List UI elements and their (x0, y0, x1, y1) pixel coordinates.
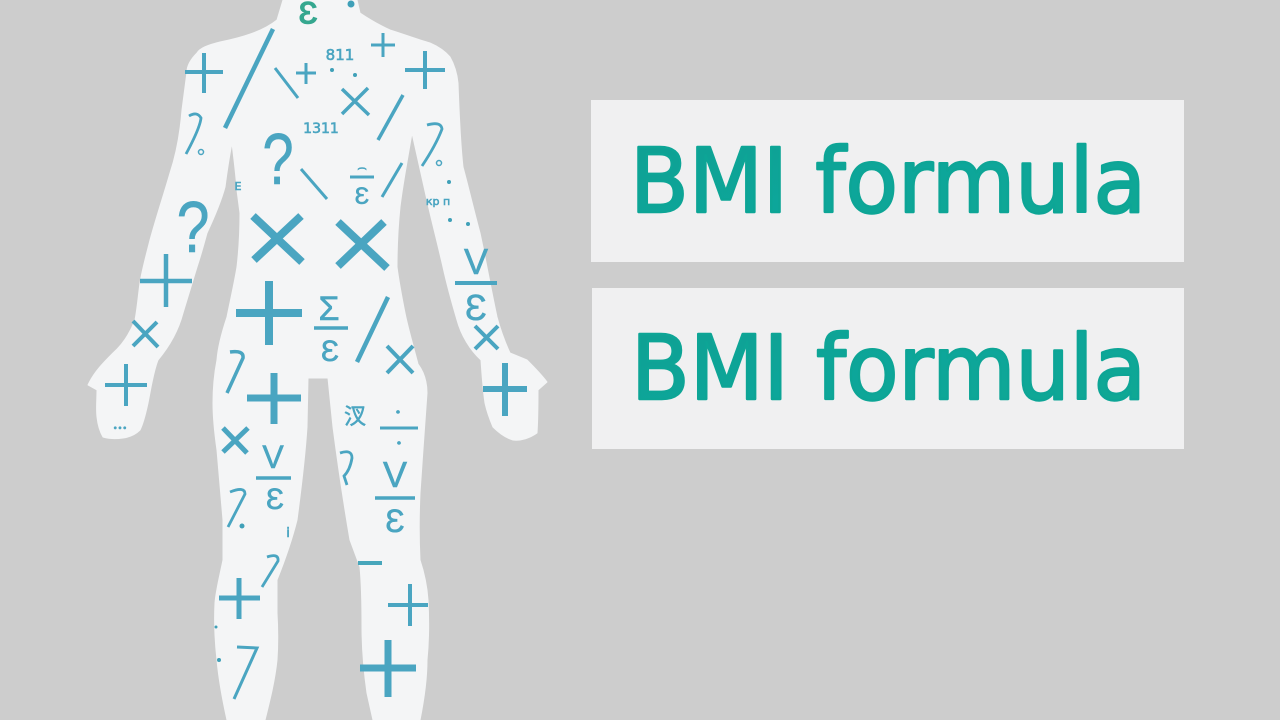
math glyph labels: Σ (318, 290, 340, 328)
panel: bottom BMI formula (592, 288, 1184, 449)
math glyph labels: Ɛ (266, 483, 284, 516)
human body silhouette (88, 0, 547, 720)
math glyph labels (113, 0, 488, 541)
math glyph labels: кр п (426, 195, 450, 208)
small dots (214, 0, 470, 662)
math glyph labels: Ɛ (355, 183, 369, 210)
panel: top BMI formula (591, 100, 1184, 262)
math glyph labels: Ɛ (465, 287, 487, 328)
math glyph labels: ••• (113, 424, 127, 433)
math glyph labels: Ɛ (385, 503, 405, 539)
division slashes (225, 29, 403, 362)
math glyph labels: 811 (326, 46, 354, 64)
minus sign (358, 561, 382, 565)
heading: top BMI formula: BMI formula (630, 129, 1146, 233)
math glyph labels: E (235, 180, 242, 193)
math glyph labels: ? (262, 119, 294, 200)
math glyph labels: 汊 (344, 405, 366, 430)
math glyph labels: • (396, 437, 402, 450)
plus signs (105, 33, 527, 697)
math glyph labels: V (262, 439, 284, 475)
math glyph labels: V (383, 454, 407, 495)
heading: bottom BMI formula: BMI formula (631, 316, 1146, 420)
math symbols scattered over body (105, 29, 527, 699)
multiply signs (133, 88, 498, 453)
hook marks (186, 114, 442, 699)
math glyph labels: ⌢ (357, 159, 367, 176)
math glyph labels: 1311 (303, 121, 339, 137)
math glyph labels: • (395, 406, 401, 419)
math glyph labels: ? (177, 186, 209, 267)
fraction bars (256, 177, 497, 498)
math glyph labels: V (464, 241, 488, 282)
math glyph labels: i (286, 526, 290, 541)
math glyph labels: Ɛ (321, 335, 339, 368)
